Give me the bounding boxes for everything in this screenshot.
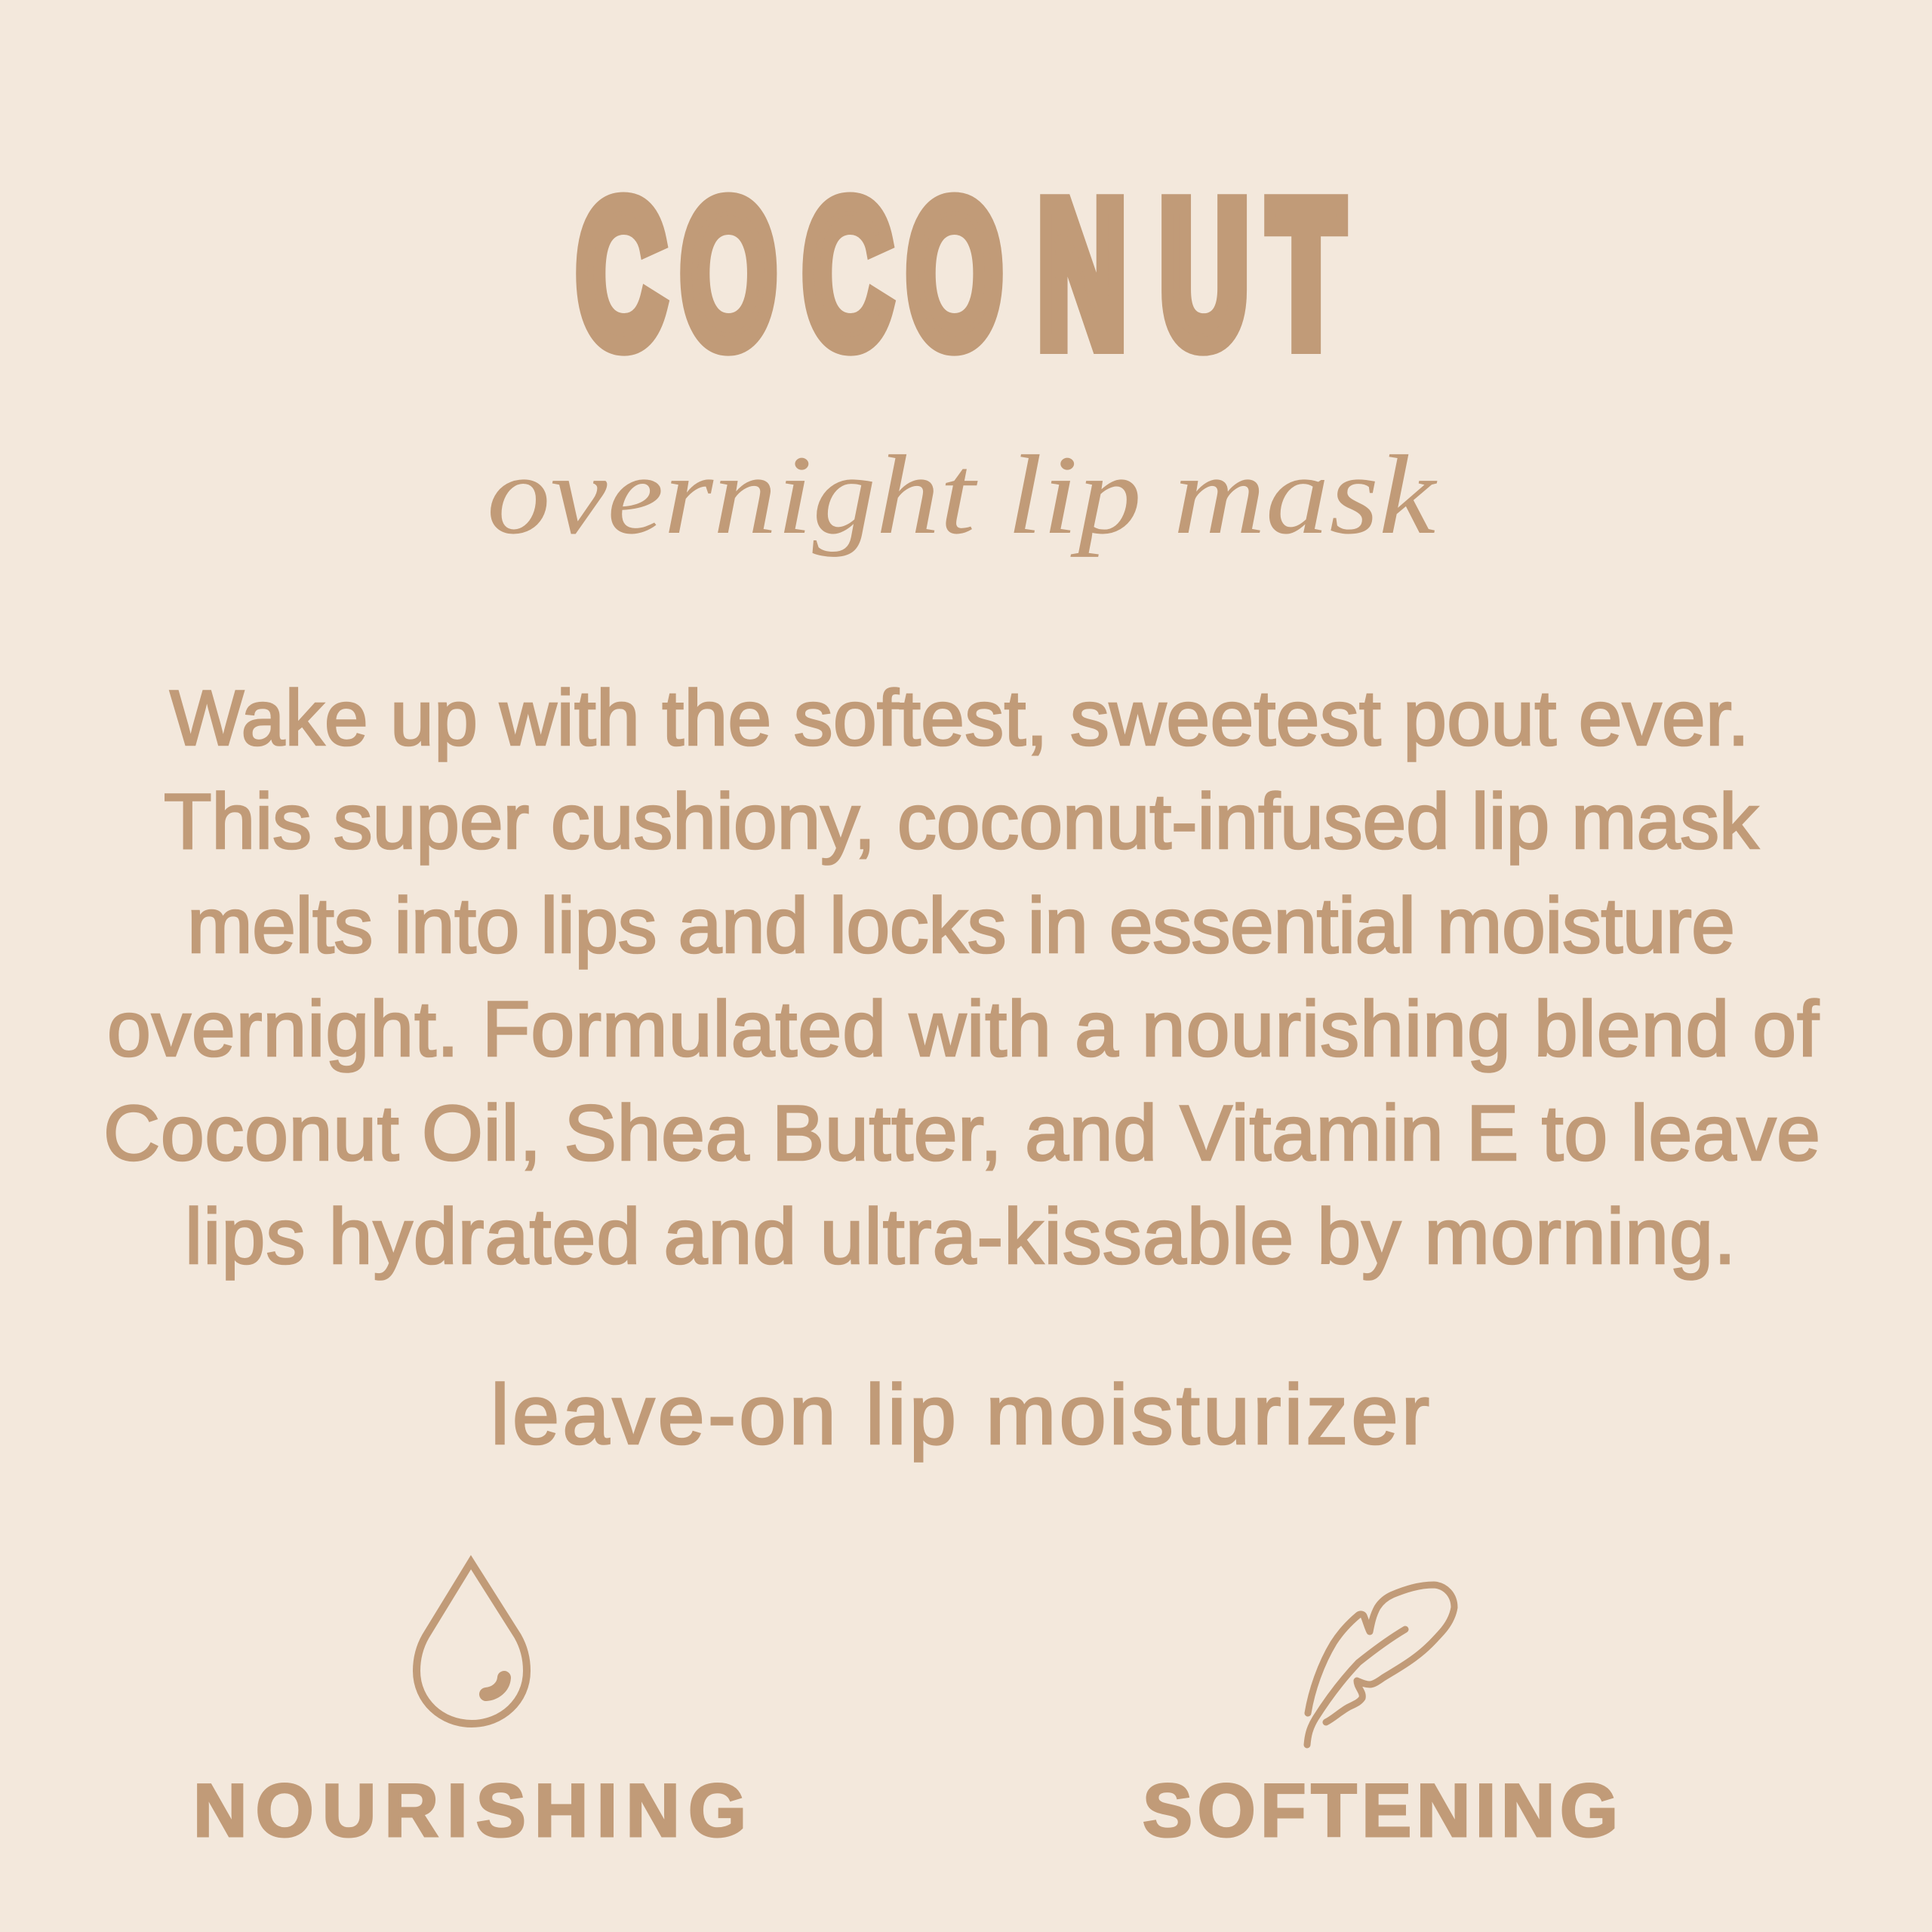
description text block: lips hydrated and ultra-kissable by morning.	[185, 1193, 1736, 1281]
title: COCONUT	[577, 160, 1343, 388]
icon: water drop	[417, 1562, 527, 1724]
icon: feather	[1307, 1585, 1454, 1745]
subtitle script: overnight lip mask	[487, 432, 1438, 558]
label: nourishing: NOURISHING	[193, 1768, 746, 1852]
description text block: overnight. Formulated with a nourishing blend of	[107, 986, 1820, 1073]
product type line: leave-on lip moisturizer	[491, 1367, 1429, 1462]
label: softening: SOFTENING	[1143, 1768, 1618, 1852]
description text block: Wake up with the softest, sweetest pout ever.	[170, 675, 1749, 762]
description text block	[103, 675, 1820, 1281]
description text block: This super cushiony, coconut-infused lip mask	[164, 778, 1759, 866]
description text block: melts into lips and locks in essential moisture	[187, 882, 1735, 970]
description text block: Coconut Oil, Shea Butter, and Vitamin E to leave	[103, 1090, 1820, 1177]
